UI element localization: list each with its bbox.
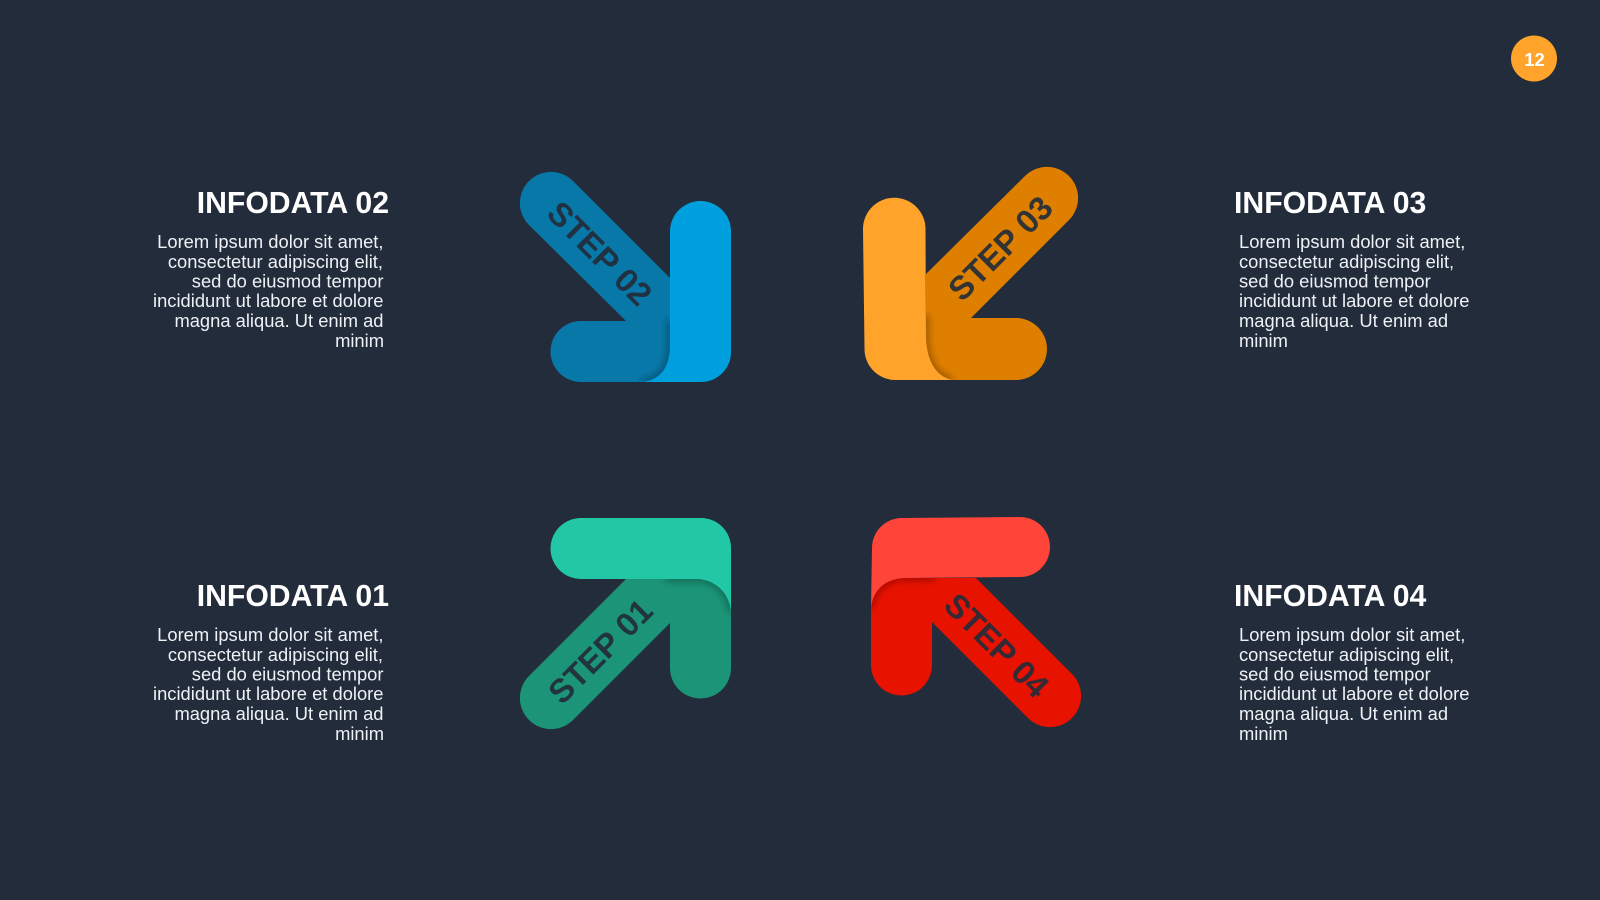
page number badge: 12 xyxy=(1524,49,1545,70)
arrow: step 01: STEP 01 xyxy=(541,592,660,711)
text block: infodata 03: sed do eiusmod tempor xyxy=(1239,270,1431,292)
page number badge xyxy=(1511,36,1557,82)
arrow: step 04 xyxy=(871,517,1081,727)
text block: infodata 04: minim xyxy=(1239,723,1288,744)
text block: infodata 04 xyxy=(1234,580,1469,744)
text block: infodata 02: Lorem ipsum dolor sit amet, xyxy=(157,231,384,252)
text block: infodata 01: sed do eiusmod tempor xyxy=(192,664,384,684)
text block: infodata 03: magna aliqua. Ut enim ad xyxy=(1239,310,1448,331)
text block: infodata 02: consectetur adipiscing elit, xyxy=(168,251,383,272)
arrow: step 03: STEP 03 xyxy=(941,189,1060,308)
text block: infodata 04: incididunt ut labore et dolore xyxy=(1239,683,1469,704)
text block: infodata 04: INFODATA 04 xyxy=(1234,580,1427,613)
text block: infodata 03: incididunt ut labore et dolore xyxy=(1239,290,1469,311)
arrow: step 02: STEP 02 xyxy=(540,194,659,313)
text block: infodata 03: minim xyxy=(1239,330,1288,351)
text block: infodata 02: minim xyxy=(335,330,384,351)
text block: infodata 02: incididunt ut labore et dolore xyxy=(153,290,384,311)
text block: infodata 01: consectetur adipiscing elit, xyxy=(168,644,383,665)
text block: infodata 01 xyxy=(153,580,389,744)
text block: infodata 01: minim xyxy=(335,723,384,744)
arrow: step 04: STEP 04 xyxy=(937,586,1057,705)
arrow: step 03 xyxy=(863,167,1078,380)
text block: infodata 01: Lorem ipsum dolor sit amet, xyxy=(157,624,384,645)
text block: infodata 04: magna aliqua. Ut enim ad xyxy=(1239,703,1448,724)
text block: infodata 01: incididunt ut labore et dolore xyxy=(153,683,384,704)
text block: infodata 02: INFODATA 02 xyxy=(197,187,389,220)
text block: infodata 03: consectetur adipiscing elit, xyxy=(1239,251,1454,272)
text block: infodata 02 xyxy=(153,187,389,351)
text block: infodata 01: magna aliqua. Ut enim ad xyxy=(174,703,384,724)
text block: infodata 04: consectetur adipiscing elit, xyxy=(1239,644,1454,665)
arrow: step 02 xyxy=(520,172,731,382)
text block: infodata 02: sed do eiusmod tempor xyxy=(192,270,384,292)
text block: infodata 03 xyxy=(1234,187,1469,351)
arrow: step 01 xyxy=(520,518,731,729)
text block: infodata 02: magna aliqua. Ut enim ad xyxy=(174,310,384,331)
text block: infodata 04: sed do eiusmod tempor xyxy=(1239,664,1431,684)
text block: infodata 03: INFODATA 03 xyxy=(1234,187,1426,220)
text block: infodata 03: Lorem ipsum dolor sit amet, xyxy=(1239,231,1465,252)
text block: infodata 04: Lorem ipsum dolor sit amet, xyxy=(1239,624,1465,645)
text block: infodata 01: INFODATA 01 xyxy=(197,580,389,613)
